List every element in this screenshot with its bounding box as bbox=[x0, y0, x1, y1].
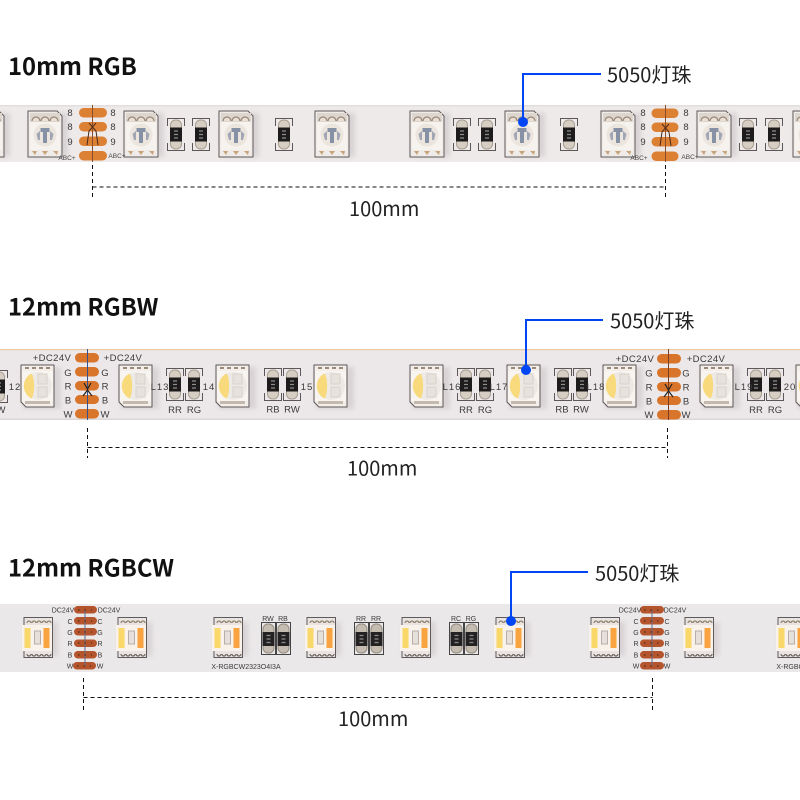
LED strip: 10mm RGB: 8 bbox=[110, 122, 116, 133]
LED strip: 10mm RGB: 8 bbox=[683, 122, 689, 133]
LED strip: 12mm RGBW: L13 bbox=[151, 382, 169, 393]
LED strip: 12mm RGBCW: W bbox=[664, 664, 671, 670]
LED strip: 12mm RGBCW: G bbox=[67, 630, 73, 637]
LED strip: 12mm RGBCW: R bbox=[97, 641, 103, 648]
dimension: 100mm: 100mm bbox=[347, 452, 417, 482]
LED strip: 12mm RGBCW: DC24V bbox=[664, 608, 687, 614]
callout: 5050 LED bbox=[506, 558, 679, 626]
LED strip: 12mm RGBCW: RR bbox=[371, 616, 381, 623]
LED strip: 12mm RGBW: W bbox=[645, 410, 654, 421]
LED strip: 10mm RGB: 9 bbox=[640, 137, 646, 148]
LED strip: 12mm RGBW: W bbox=[101, 410, 110, 420]
LED strip: 12mm RGBW: R bbox=[646, 382, 653, 394]
callout: 5050 LED bbox=[518, 59, 691, 127]
LED strip: 10mm RGB: 8 bbox=[683, 108, 689, 119]
LED strip: 12mm RGBW: B bbox=[65, 396, 71, 406]
LED strip: 12mm RGBW: R bbox=[65, 382, 72, 392]
LED strip: 12mm RGBCW: W bbox=[633, 664, 640, 670]
LED strip: 12mm RGBW: RG bbox=[187, 405, 201, 416]
LED strip: 12mm RGBCW: W bbox=[67, 664, 74, 670]
LED strip: 12mm RGBCW: W bbox=[97, 664, 104, 670]
LED strip: 12mm RGBW: +DC24V bbox=[687, 354, 726, 365]
dimension: 100mm: 100mm bbox=[338, 703, 408, 732]
LED strip: 12mm RGBCW: G bbox=[633, 630, 639, 637]
LED strip: 12mm RGBCW: RW bbox=[262, 616, 274, 623]
dimension: 100mm bbox=[88, 428, 668, 482]
LED strip: 12mm RGBW: G bbox=[101, 368, 109, 379]
LED strip: 12mm RGBW: 12 bbox=[9, 382, 21, 393]
LED strip: 12mm RGBW: RW bbox=[284, 404, 300, 416]
LED strip: 12mm RGBW: +DC24V bbox=[33, 353, 72, 364]
LED strip: 12mm RGBW: +DC24V bbox=[104, 353, 143, 364]
LED strip: 12mm RGBCW: G bbox=[664, 630, 670, 637]
LED strip: 10mm RGB: 8 bbox=[640, 122, 646, 133]
LED strip: 12mm RGBW: B bbox=[102, 396, 108, 406]
LED strip: 12mm RGBW: W bbox=[64, 410, 73, 420]
LED strip: 12mm RGBCW: X-RGBCW2323O4I3A bbox=[211, 664, 281, 671]
LED strip: 12mm RGBCW: RC bbox=[451, 616, 461, 623]
LED strip: 12mm RGBW: B bbox=[683, 396, 689, 408]
LED strip: 12mm RGBW: L18 bbox=[587, 382, 605, 393]
LED strip: 10mm RGB bbox=[0, 105, 800, 162]
LED strip: 12mm RGBW: W bbox=[682, 410, 691, 421]
dimension: 100mm: 100mm bbox=[349, 193, 419, 222]
dimension: 100mm bbox=[84, 678, 652, 732]
callout: 5050 LED: 5050灯珠 bbox=[610, 305, 694, 334]
dimension: 100mm bbox=[92, 165, 666, 222]
LED strip: 12mm RGBW: 14 bbox=[203, 382, 215, 393]
LED strip: 12mm RGBW: L17 bbox=[490, 382, 508, 393]
LED strip: 12mm RGBW: G bbox=[682, 368, 690, 380]
LED strip: 10mm RGB: 8 bbox=[67, 108, 73, 119]
LED strip: 10mm RGB: ABC+ bbox=[58, 155, 76, 162]
LED strip: 12mm RGBCW: R bbox=[633, 641, 639, 648]
LED strip: 10mm RGB: 8 bbox=[67, 122, 73, 133]
section: 10mm RGB bbox=[0, 47, 800, 222]
callout: 5050 LED: 5050灯珠 bbox=[607, 59, 691, 88]
LED strip: 12mm RGBW: RR bbox=[749, 405, 763, 416]
LED strip: 12mm RGBW: RR bbox=[168, 405, 182, 416]
LED strip: 12mm RGBCW: C bbox=[664, 619, 670, 626]
LED strip: 12mm RGBW: 20 bbox=[784, 382, 796, 393]
LED strip: 12mm RGBW bbox=[0, 349, 800, 421]
LED strip: 12mm RGBW: G bbox=[64, 368, 72, 379]
LED strip: 12mm RGBW: R bbox=[683, 382, 690, 394]
LED strip: 12mm RGBCW: B bbox=[98, 652, 103, 660]
LED strip: 10mm RGB: ABC+ bbox=[681, 154, 699, 161]
heading: 12mm RGBW: 12mm RGBW bbox=[8, 288, 159, 322]
LED strip: 10mm RGB: ABC+ bbox=[630, 155, 648, 162]
LED strip: 10mm RGB: 9 bbox=[683, 137, 689, 148]
LED strip: 12mm RGBW: RW bbox=[573, 404, 589, 416]
LED strip: 10mm RGB: ABC+ bbox=[108, 153, 126, 160]
LED strip: 12mm RGBW: G bbox=[645, 368, 653, 380]
heading: 10mm RGB: 10mm RGB bbox=[8, 47, 137, 82]
LED strip: 12mm RGBCW: R bbox=[664, 641, 670, 648]
LED strip: 10mm RGB: 9 bbox=[110, 137, 116, 148]
LED strip: 12mm RGBW: 15 bbox=[301, 382, 313, 393]
LED strip: 10mm RGB: 8 bbox=[110, 108, 116, 119]
LED strip: 12mm RGBW: RG bbox=[768, 405, 782, 416]
LED strip: 12mm RGBW: RR bbox=[459, 405, 473, 416]
LED strip: 10mm RGB: 8 bbox=[640, 108, 646, 119]
LED strip: 12mm RGBW: B bbox=[646, 396, 652, 408]
LED strip: 12mm RGBW: RG bbox=[478, 405, 492, 416]
LED strip: 12mm RGBCW: C bbox=[633, 619, 639, 626]
LED strip: 12mm RGBW: L19 bbox=[735, 382, 753, 393]
LED strip: 12mm RGBCW: RG bbox=[466, 616, 476, 623]
LED strip: 12mm RGBCW: B bbox=[68, 652, 73, 660]
callout: 5050 LED bbox=[521, 305, 694, 375]
LED strip: 12mm RGBW: L16 bbox=[443, 382, 461, 393]
LED strip: 12mm RGBCW: G bbox=[97, 630, 103, 637]
LED strip: 12mm RGBCW: DC24V bbox=[52, 608, 75, 614]
heading: 12mm RGBCW: 12mm RGBCW bbox=[8, 548, 174, 584]
section: 12mm RGBW bbox=[0, 288, 800, 482]
LED strip: 12mm RGBCW: C bbox=[97, 619, 103, 626]
LED strip: 12mm RGBCW: DC24V bbox=[619, 608, 642, 614]
LED strip: 12mm RGBCW: C bbox=[67, 619, 73, 626]
LED strip: 12mm RGBW: +DC24V bbox=[616, 354, 655, 365]
LED strip: 12mm RGBCW: RR bbox=[356, 616, 366, 623]
LED strip: 12mm RGBCW: B bbox=[634, 652, 639, 660]
LED strip: 12mm RGBCW: RB bbox=[278, 616, 288, 623]
LED strip: 10mm RGB: 9 bbox=[67, 137, 73, 148]
LED strip: 12mm RGBW: RB bbox=[266, 404, 280, 416]
LED strip: 12mm RGBCW: B bbox=[665, 652, 670, 660]
LED strip: 12mm RGBW: R bbox=[102, 382, 109, 392]
LED strip: 12mm RGBCW: R bbox=[67, 641, 73, 648]
LED strip: 12mm RGBCW bbox=[0, 604, 800, 672]
LED strip: 12mm RGBCW: DC24V bbox=[98, 608, 121, 614]
callout: 5050 LED: 5050灯珠 bbox=[595, 558, 679, 586]
section: 12mm RGBCW bbox=[0, 548, 800, 732]
LED strip: 12mm RGBW: RB bbox=[555, 404, 569, 416]
